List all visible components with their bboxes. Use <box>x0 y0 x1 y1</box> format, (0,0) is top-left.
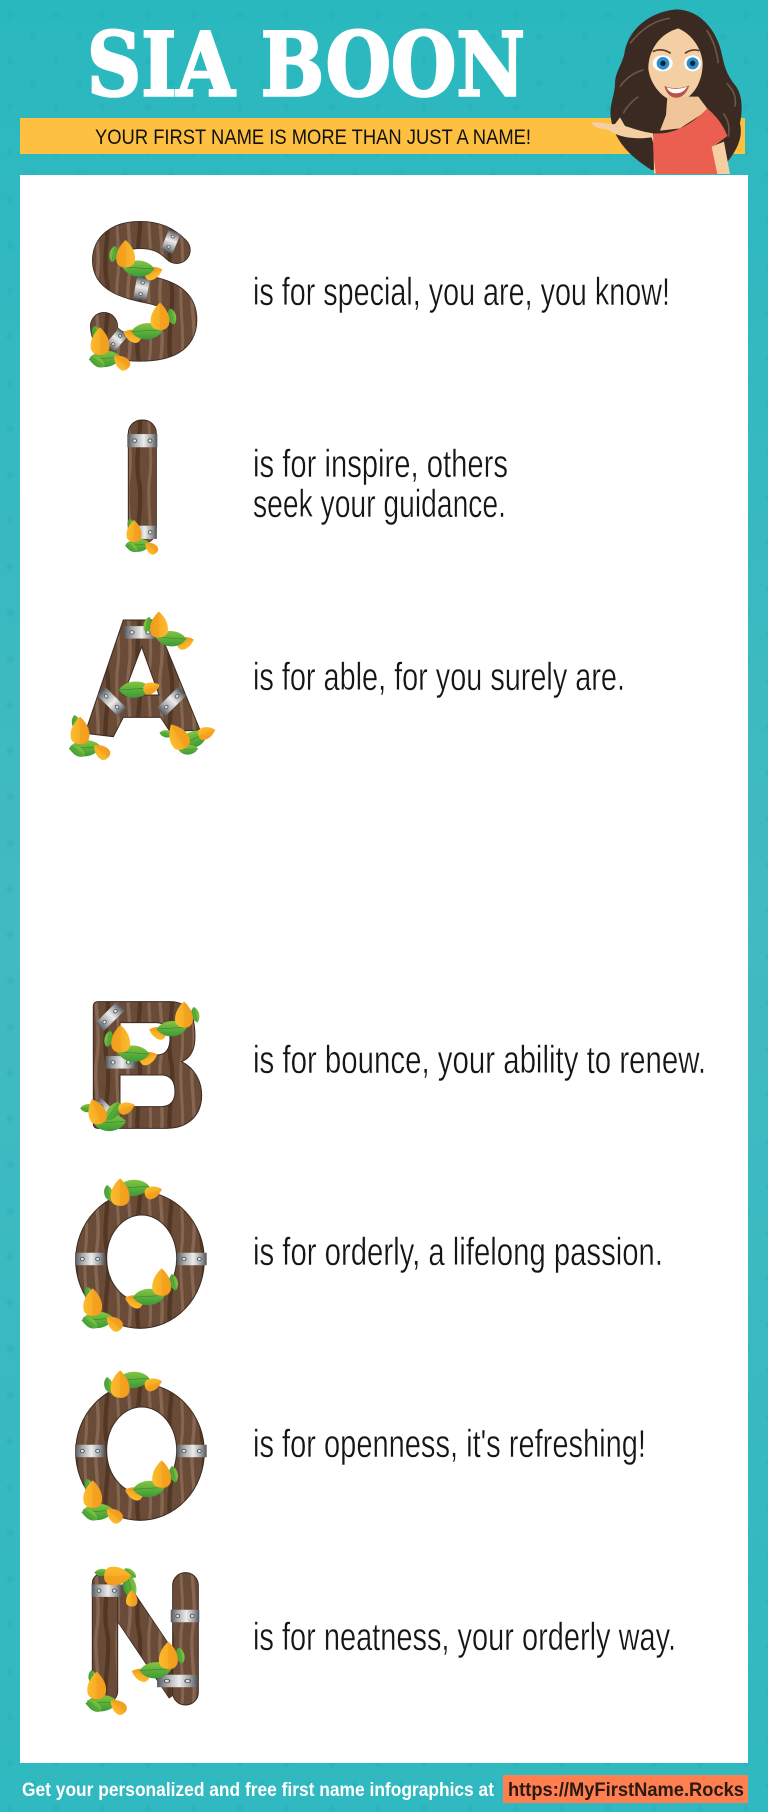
letter N <box>85 1566 199 1717</box>
row: N <box>85 1566 676 1717</box>
letter I <box>124 420 160 557</box>
letter S <box>88 229 183 373</box>
letter O <box>75 1370 207 1526</box>
footer url badge: https://MyFirstName.Rocks <box>508 1780 744 1801</box>
tagline banner <box>20 118 745 154</box>
letter A <box>68 611 217 762</box>
tagline banner: YOUR FIRST NAME IS MORE THAN JUST A NAME! <box>95 126 531 149</box>
text: A line: is for able, for you surely are. <box>253 656 625 699</box>
row: B <box>80 1001 706 1131</box>
row: S <box>88 229 670 373</box>
text: I lines <box>253 443 508 526</box>
letter B <box>80 1001 202 1131</box>
letter O <box>75 1178 207 1334</box>
row: A <box>68 611 625 762</box>
text: I lines: is for inspire, others <box>253 443 508 486</box>
character illustration <box>592 9 742 174</box>
row: O <box>75 1178 663 1334</box>
text: second O line: is for openness, it's refreshing! <box>253 1423 646 1466</box>
row: I <box>124 420 508 557</box>
row: second O <box>75 1370 646 1526</box>
title: SIA BOON <box>87 12 525 116</box>
text: I lines: seek your guidance. <box>253 483 506 526</box>
footer call to action: Get your personalized and free first name infographics at <box>22 1780 495 1801</box>
